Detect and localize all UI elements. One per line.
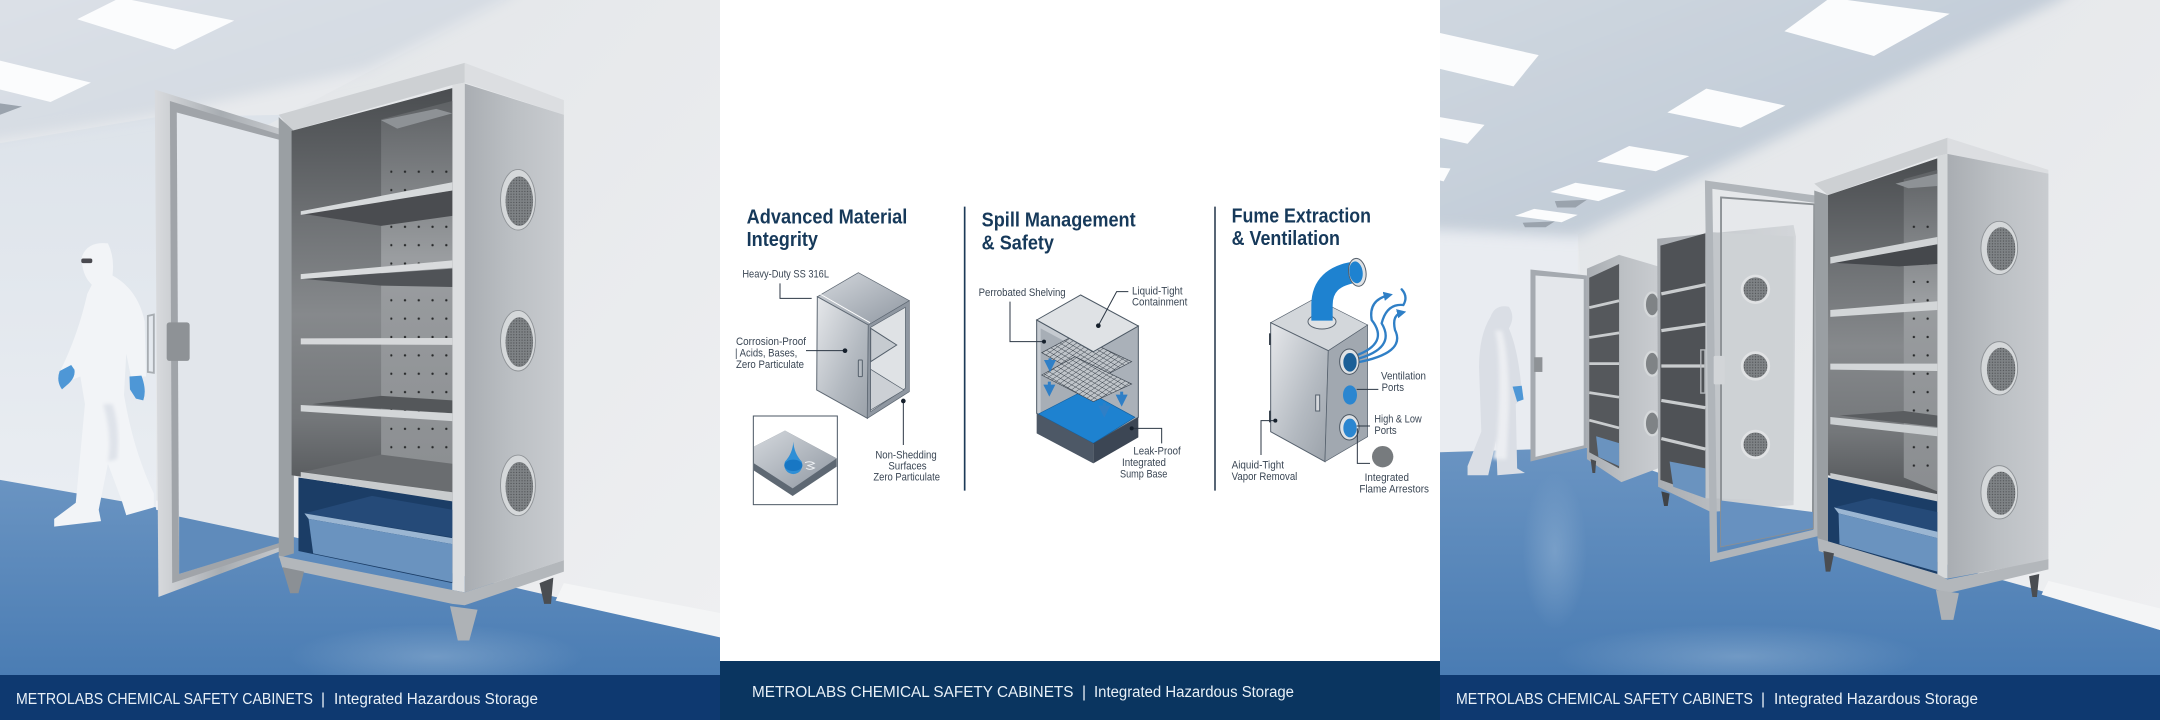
label: liquid-tight vapor removal <box>1232 419 1297 483</box>
blue spill tray <box>304 496 452 582</box>
ceiling lights and vents <box>1440 0 1950 227</box>
side ports <box>1340 349 1359 440</box>
perforated shelves <box>1042 335 1132 402</box>
label: integrated flame arrestors: Integrated <box>1365 472 1409 484</box>
open glass door of the near cabinet, showing middle cabinet ports <box>1701 185 1819 557</box>
far cabinet <box>1530 255 1659 482</box>
cabinet body in brushed stainless steel <box>279 63 564 641</box>
footer bar: middle panel: | <box>1082 684 1086 701</box>
inset: liquid droplet on steel surface <box>753 416 837 505</box>
near cabinet base and legs <box>1817 538 2048 620</box>
column: advanced material integrity <box>735 206 940 505</box>
footer bar: right panel <box>1440 675 2160 720</box>
label: non-shedding surfaces <box>873 399 940 484</box>
footer bar: right panel: Integrated Hazardous Storage <box>1774 691 1978 708</box>
label: liquid-tight vapor removal: Vapor Removal <box>1232 471 1297 483</box>
label: corrosion-proof <box>735 336 847 371</box>
heading: advanced material integrity: Advanced Material <box>747 206 907 228</box>
drainage arrows <box>1049 358 1122 412</box>
label: corrosion-proof: Corrosion-Proof <box>736 336 807 348</box>
panel: row of cabinets photo scene <box>1440 0 2160 675</box>
label: integrated flame arrestors <box>1357 428 1429 496</box>
heading: advanced material integrity: Integrity <box>747 229 818 251</box>
heading: spill management and safety: Spill Management <box>982 210 1136 232</box>
footer bar: right panel: METROLABS CHEMICAL SAFETY CABINETS <box>1456 691 1753 708</box>
heading: spill management and safety <box>982 210 1136 254</box>
label: non-shedding surfaces: Non-Shedding <box>875 449 937 461</box>
label: liquid-tight containment <box>1096 285 1187 328</box>
footer bar: left panel: | <box>321 691 325 708</box>
cabinet glass door, open <box>148 90 287 597</box>
near cabinet blue tray <box>1834 498 1937 572</box>
technician viewed from behind <box>1468 306 1525 475</box>
icon: flame arrestor mesh disc <box>1372 446 1393 467</box>
near cabinet in stainless steel <box>1814 138 2048 620</box>
ventilation ports with mesh, three on the side <box>501 169 535 516</box>
panel: single open cabinet photo scene <box>0 0 720 675</box>
label: non-shedding surfaces: Zero Particulate <box>873 472 940 484</box>
diagram: isometric stainless cabinet <box>817 273 909 418</box>
column: spill management and safety <box>965 207 1187 491</box>
footer bar: left panel <box>0 675 720 720</box>
footer bar: right panel: | <box>1761 691 1765 708</box>
label: corrosion-proof: Zero Particulate <box>736 359 804 371</box>
ceiling lights <box>0 0 234 115</box>
technician in white cleanroom suit with blue gloves <box>54 243 154 527</box>
column: fume extraction and ventilation <box>1215 206 1429 496</box>
label: non-shedding surfaces: Surfaces <box>888 460 927 472</box>
label: integrated flame arrestors: Flame Arrestors <box>1359 484 1429 496</box>
heading: fume extraction and ventilation: Fume Extraction <box>1232 206 1371 228</box>
fume flow arrows <box>1355 289 1405 363</box>
label: ventilation ports <box>1357 370 1426 394</box>
exhaust duct <box>1308 257 1368 329</box>
label: liquid-tight containment: Containment <box>1132 297 1187 309</box>
near cabinet shelves <box>1830 237 1937 501</box>
label: heavy-duty SS 316L: Heavy-Duty SS 316L <box>742 268 829 280</box>
label: liquid-tight containment: Liquid-Tight <box>1132 285 1183 297</box>
five shelves <box>301 182 452 501</box>
footer bar: middle panel <box>720 661 1440 720</box>
footer bar: left panel: METROLABS CHEMICAL SAFETY CABINETS <box>16 691 313 708</box>
label: ventilation ports: Ventilation <box>1381 370 1426 382</box>
footer bar: middle panel: Integrated Hazardous Storage <box>1094 684 1294 701</box>
diagram: ventilated cabinet with duct <box>1269 257 1405 462</box>
label: high and low ports <box>1357 413 1422 437</box>
label: perforated shelving: Perrobated Shelving <box>979 287 1066 299</box>
label: heavy-duty SS 316L <box>742 268 829 298</box>
label: leak-proof sump base <box>1120 426 1181 481</box>
label: leak-proof sump base: Integrated <box>1122 457 1166 469</box>
cabinet interior with perforated back panel <box>292 88 452 583</box>
cleanroom background: ceiling, walls and floor <box>1348 0 2160 720</box>
middle cabinet <box>1657 225 1796 512</box>
label: liquid-tight vapor removal: Aiquid-Tight <box>1232 460 1284 472</box>
diagram: containment cutaway with sump <box>1037 295 1138 463</box>
label: leak-proof sump base: Sump Base <box>1120 469 1167 481</box>
label: leak-proof sump base: Leak-Proof <box>1133 446 1181 458</box>
heading: fume extraction and ventilation <box>1232 206 1371 250</box>
label: high and low ports: Ports <box>1374 425 1397 437</box>
label: corrosion-proof: | Acids, Bases, <box>735 348 797 360</box>
near cabinet side ports <box>1981 221 2018 519</box>
heading: fume extraction and ventilation: & Ventilation <box>1232 228 1340 250</box>
heading: advanced material integrity <box>747 206 907 251</box>
panel: technical feature diagrams <box>720 0 1440 720</box>
cleanroom background: ceiling, walls and floor <box>0 0 720 720</box>
near cabinet interior <box>1828 158 1937 574</box>
footer bar: middle panel: METROLABS CHEMICAL SAFETY CABINETS <box>752 684 1074 701</box>
label: high and low ports: High & Low <box>1374 413 1422 425</box>
base frame and legs <box>279 556 564 641</box>
label: perforated shelving <box>979 287 1066 344</box>
label: ventilation ports: Ports <box>1382 382 1404 394</box>
heading: spill management and safety: & Safety <box>982 232 1054 254</box>
footer bar: left panel: Integrated Hazardous Storage <box>334 691 538 708</box>
